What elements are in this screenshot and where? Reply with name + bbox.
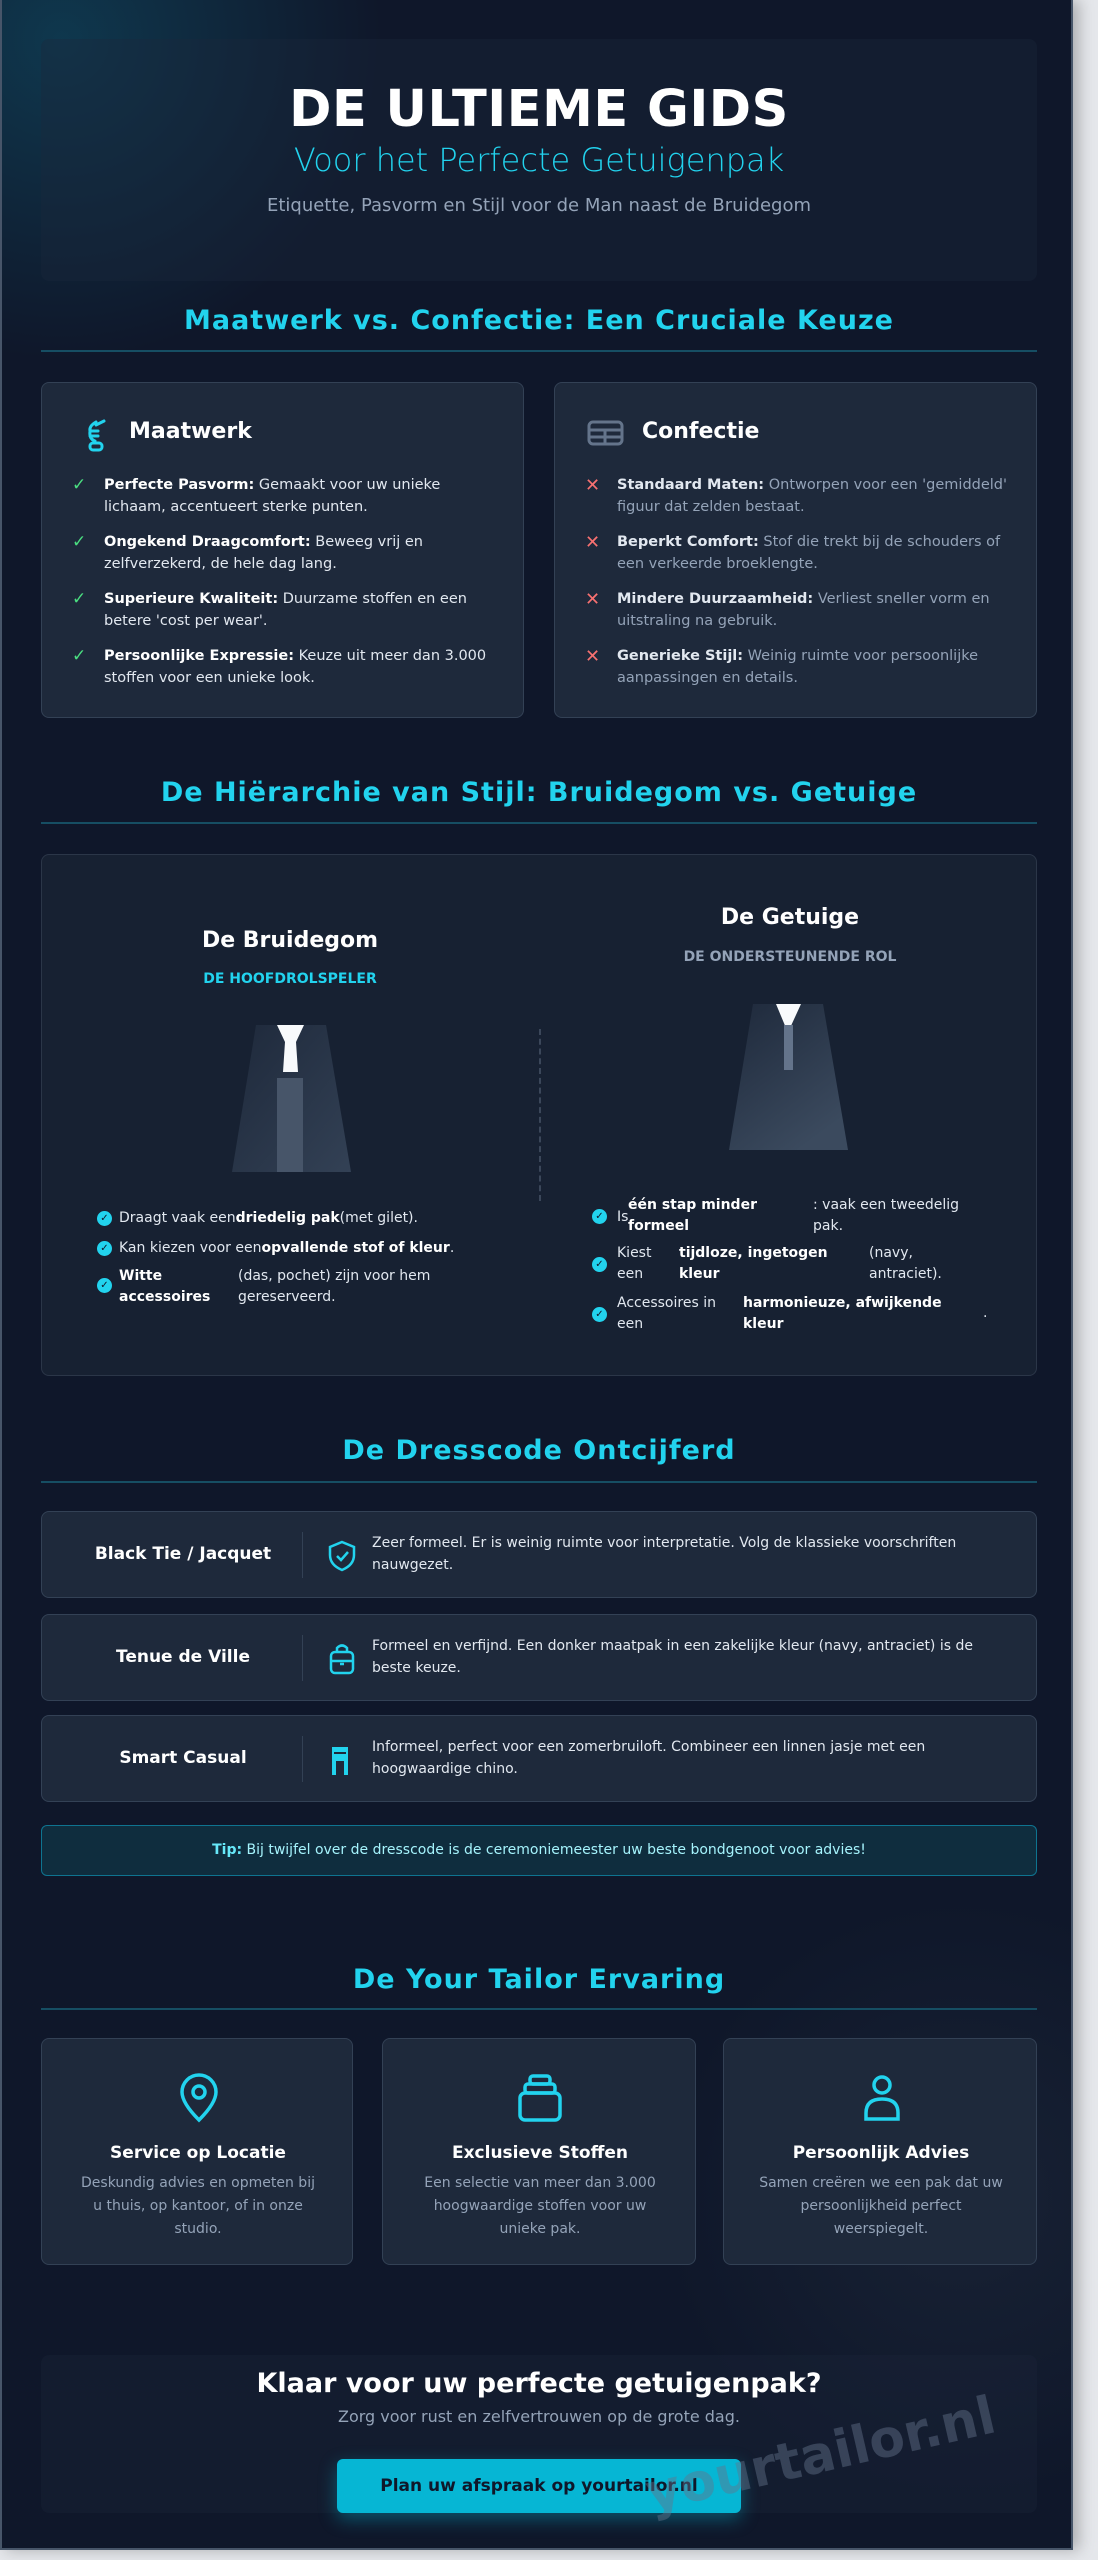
- list items: Persoonlijke Expressie: Keuze uit meer dan 3.000 stoffen voor een unieke look.: [104, 648, 486, 686]
- panel: service op locatie: Deskundig advies en opmeten bij u thuis, op kantoor, of in onze studio.: [81, 2175, 315, 2237]
- panel: service op locatie: [41, 2038, 353, 2265]
- icon: fabric stack: [518, 2074, 562, 2122]
- list items: [72, 475, 486, 686]
- list items: Superieure Kwaliteit: Duurzame stoffen en een betere 'cost per wear'.: [104, 591, 467, 628]
- list items: Mindere Duurzaamheid: Verliest sneller vorm en uitstraling na gebruik.: [617, 591, 990, 628]
- icon: briefcase: [330, 1644, 354, 1674]
- column: getuige: [592, 905, 987, 1332]
- heading getuige: De Getuige: [721, 905, 859, 930]
- list: getuige: kleur: [679, 1266, 719, 1282]
- title: DE ULTIEME GIDS: [289, 80, 789, 139]
- list: getuige: pak.: [813, 1218, 843, 1234]
- list items: ✓: [72, 646, 86, 666]
- watermark: yourtailor.nl: [640, 2386, 1001, 2524]
- list: getuige: (navy,: [869, 1245, 913, 1261]
- row: black tie: [41, 1511, 1037, 1598]
- section heading: dresscode: De Dresscode Ontcijferd: [342, 1435, 736, 1466]
- list: getuige: ✓: [595, 1259, 604, 1270]
- list: getuige: ✓: [595, 1211, 604, 1222]
- list items: ✕: [585, 475, 600, 496]
- list: getuige: tijdloze, ingetogen: [679, 1245, 828, 1261]
- tagline: Etiquette, Pasvorm en Stijl voor de Man naast de Bruidegom: [267, 195, 811, 216]
- list items: ✓: [72, 475, 86, 495]
- panel: hierarchie: [41, 854, 1037, 1376]
- list items: Beperkt Comfort: Stof die trekt bij de schouders of een verkeerde broeklengte.: [617, 534, 1000, 572]
- list items: ✕: [585, 589, 600, 610]
- row: tenue de ville: Tenue de Ville: [116, 1647, 250, 1667]
- panel: exclusieve stoffen: [382, 2038, 696, 2265]
- list: getuige: een: [617, 1316, 643, 1332]
- row: smart casual: [41, 1715, 1037, 1802]
- section heading: maatwerk vs confectie: Maatwerk vs. Confectie: Een Cruciale Keuze: [184, 305, 894, 336]
- list: getuige: Is: [617, 1209, 628, 1225]
- row: smart casual: Informeel, perfect voor een zomerbruiloft. Combineer een linnen jasje met een hoogwaardige chino.: [372, 1739, 925, 1777]
- list: getuige: harmonieuze, afwijkende: [743, 1295, 942, 1311]
- header panel: [41, 39, 1037, 281]
- list: getuige: een: [617, 1266, 643, 1282]
- section heading: your tailor ervaring: De Your Tailor Ervaring: [353, 1964, 725, 1995]
- panel: persoonlijk advies: Persoonlijk Advies: [793, 2143, 969, 2163]
- list items: Perfecte Pasvorm: Gemaakt voor uw unieke lichaam, accentueert sterke punten.: [104, 477, 440, 514]
- panel: confectie: [554, 382, 1037, 718]
- list: getuige: antraciet).: [869, 1266, 942, 1282]
- list: bruidegom: Kan kiezen voor eenopvallende stof of kleur.: [119, 1240, 454, 1256]
- list: getuige: één stap minder: [628, 1197, 757, 1213]
- heading: Confectie: [642, 419, 759, 444]
- icon: trousers: [332, 1747, 348, 1775]
- list: getuige: Kiest: [617, 1245, 651, 1261]
- icon: groom suit: [232, 1025, 351, 1172]
- label ondersteunende rol: DE ONDERSTEUNENDE ROL: [684, 949, 896, 965]
- panel: exclusieve stoffen: Exclusieve Stoffen: [452, 2143, 628, 2163]
- list: getuige: Accessoires in: [617, 1295, 716, 1311]
- icon: witness suit: [729, 1004, 848, 1150]
- list: getuige: ✓: [595, 1309, 604, 1320]
- cta heading: Klaar voor uw perfecte getuigenpak?: [256, 2368, 822, 2399]
- callout: tip: Tip: Bij twijfel over de dresscode is de ceremoniemeester uw beste bondgenoot voor advies!: [212, 1842, 866, 1858]
- row: black tie: Black Tie / Jacquet: [95, 1544, 271, 1564]
- column: bruidegom: [97, 928, 454, 1305]
- row: smart casual: Smart Casual: [119, 1748, 247, 1768]
- row: tenue de ville: Formeel en verfijnd. Een donker maatpak in een zakelijke kleur (navy, antraciet) is de beste keuze.: [372, 1638, 973, 1676]
- list items: ✕: [585, 646, 600, 667]
- subtitle: Voor het Perfecte Getuigenpak: [294, 141, 784, 179]
- list items: Ongekend Draagcomfort: Beweeg vrij en zelfverzekerd, de hele dag lang.: [104, 534, 423, 572]
- panel: call to action: [41, 2355, 1037, 2513]
- heading bruidegom: De Bruidegom: [202, 928, 378, 953]
- list: bruidegom: [97, 1210, 454, 1305]
- list: bruidegom: ✓: [100, 1280, 109, 1291]
- button: Plan uw afspraak op yourtailor.nl: [380, 2476, 698, 2496]
- list items: ✓: [72, 532, 86, 552]
- dashed divider: [539, 1029, 541, 1201]
- cta subtext: Zorg voor rust en zelfvertrouwen op de grote dag.: [338, 2407, 740, 2426]
- label hoofdrolspeler: DE HOOFDROLSPELER: [203, 971, 377, 987]
- row: black tie: Zeer formeel. Er is weinig ruimte voor interpretatie. Volg de klassieke voorschriften nauwgezet.: [372, 1535, 956, 1573]
- callout: tip: [41, 1825, 1037, 1876]
- list: bruidegom: ✓: [100, 1243, 109, 1254]
- list: bruidegom: Witte accessoires: [119, 1268, 210, 1305]
- list: getuige: : vaak een tweedelig: [813, 1197, 959, 1213]
- list items: Generieke Stijl: Weinig ruimte voor persoonlijke aanpassingen en details.: [617, 648, 978, 686]
- icon: location pin: [180, 2073, 218, 2122]
- panel: persoonlijk advies: Samen creëren we een pak dat uw persoonlijkheid perfect weerspiegelt.: [759, 2175, 1003, 2237]
- panel: persoonlijk advies: [723, 2038, 1037, 2265]
- list: getuige: [592, 1197, 987, 1332]
- panel: service op locatie: Service op Locatie: [110, 2143, 286, 2163]
- list: getuige: formeel: [628, 1218, 689, 1234]
- icon: table: [588, 420, 624, 446]
- list: bruidegom: (das, pochet) zijn voor hem gereserveerd.: [238, 1268, 430, 1305]
- list: bruidegom: ✓: [100, 1213, 109, 1224]
- list items: Standaard Maten: Ontworpen voor een 'gemiddeld' figuur dat zelden bestaat.: [617, 477, 1007, 514]
- list items: ✕: [585, 532, 600, 553]
- panel: exclusieve stoffen: Een selectie van meer dan 3.000 hoogwaardige stoffen voor uw unieke pak.: [424, 2175, 656, 2237]
- panel: maatwerk: [41, 382, 524, 718]
- icon: shield: [328, 1540, 356, 1572]
- icon: person: [864, 2075, 900, 2121]
- button: [337, 2459, 741, 2513]
- heading: Maatwerk: [129, 419, 252, 444]
- list items: ✓: [72, 589, 86, 609]
- icon: euro: [88, 419, 106, 452]
- list: getuige: .: [983, 1305, 987, 1321]
- list: bruidegom: Draagt vaak eendriedelig pak(met gilet).: [119, 1210, 418, 1226]
- section heading: hierarchie: De Hiërarchie van Stijl: Bruidegom vs. Getuige: [161, 777, 917, 808]
- row: tenue de ville: [41, 1614, 1037, 1701]
- list: getuige: kleur: [743, 1316, 783, 1332]
- list items: [585, 475, 1007, 686]
